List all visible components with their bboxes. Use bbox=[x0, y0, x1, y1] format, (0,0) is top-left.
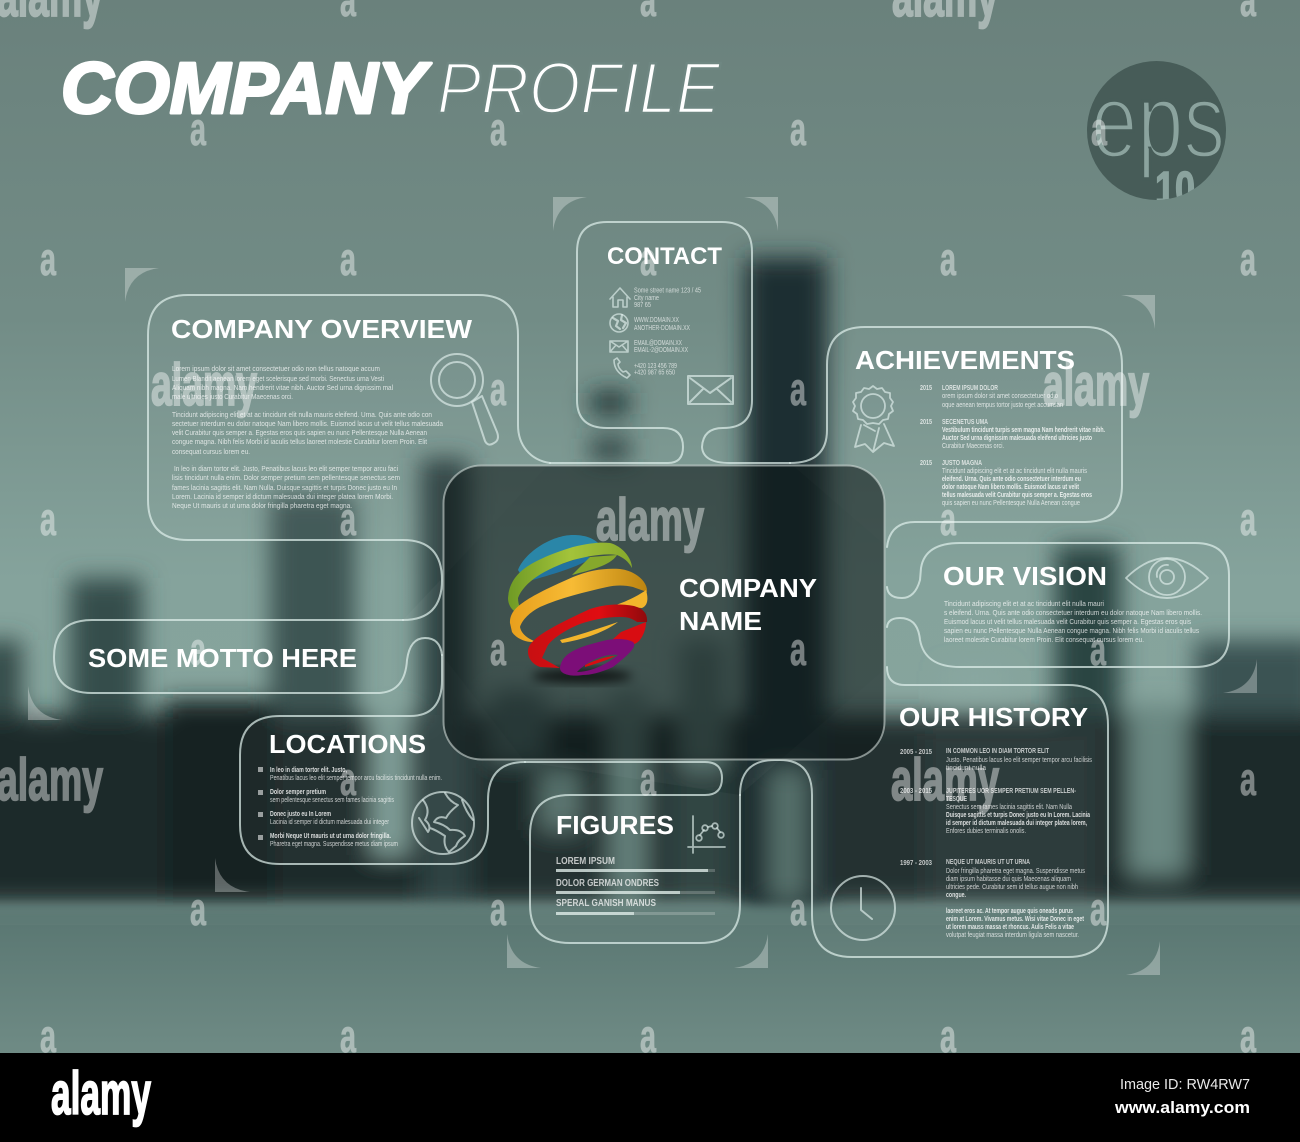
watermark grid: a bbox=[790, 103, 806, 155]
achievements list: orem ipsum dolor sit amet consectetuer odio bbox=[942, 391, 1058, 400]
progress bars bbox=[556, 855, 715, 915]
timeline text: tincidunt nulla bbox=[946, 763, 987, 772]
overview body text: velit Curabitur quis semper a. Egestas eros quis sapien eu nunc Pellentesque Nulla Aenean bbox=[172, 428, 427, 437]
watermark grid: alamy bbox=[891, 747, 999, 813]
motto text: SOME MOTTO HERE bbox=[88, 643, 357, 673]
overview body text: Tincidunt adipiscing elit et at ac tincidunt elit nulla mauris eleifend. Urna. Quis ante odio con bbox=[172, 410, 432, 419]
heading: our history: OUR HISTORY bbox=[899, 702, 1088, 732]
achievements list: 2015 bbox=[920, 417, 932, 426]
watermark grid: a bbox=[340, 233, 356, 285]
timeline text: IN COMMON LEO IN DIAM TORTOR ELIT bbox=[946, 746, 1049, 755]
heading: figures: FIGURES bbox=[556, 810, 674, 840]
vision body text: sapien eu nunc Pellentesque Nulla Aenean congue magna. Nibh felis Morbi id iaculis tellus bbox=[944, 626, 1199, 635]
watermark grid: a bbox=[940, 233, 956, 285]
watermark grid: a bbox=[1240, 493, 1256, 545]
badge: eps 10: eps bbox=[1091, 62, 1225, 180]
overview body text: Lorem ipsum dolor sit amet consectetuer odio non tellus natoque accum bbox=[172, 364, 380, 373]
overview body text: Neque Ut mauris ut ut urna dolor fringilla pharetra eget magna. bbox=[172, 501, 352, 510]
watermark grid: a bbox=[1090, 623, 1106, 675]
overview body text: In leo in diam tortor elit. Justo, Penatibus lacus leo elit semper tempor arcu faci bbox=[174, 464, 398, 473]
timeline text: JUPITERES UOR SEMPER PRETIUM SEM PELLEN- bbox=[946, 786, 1076, 795]
watermark grid: a bbox=[190, 103, 206, 155]
watermark grid: alamy bbox=[596, 487, 704, 553]
icon: magnifier bbox=[431, 354, 498, 445]
location list: Morbi Neque Ut mauris ut ut urna dolor fringilla. bbox=[270, 831, 391, 840]
panel: achievements bbox=[790, 327, 1122, 547]
timeline text: enim at Lorem. Vivamus metus. Wisi vitae Donec in eget bbox=[946, 914, 1084, 923]
footer bar: alamy bbox=[51, 1060, 151, 1127]
overview body text: Aliquam nibh magna. Nam hendrerit vitae nibh. Auctor Sed urna dignissim mal bbox=[172, 383, 393, 392]
achievements list: Curabitur Maecenas orci. bbox=[942, 441, 1004, 450]
icon: globe small bbox=[610, 314, 628, 332]
watermark grid: a bbox=[490, 103, 506, 155]
overview body text: fames lacinia sagittis elit. Nam Nulla. Duisque sagittis et turpis Donec justo eu In bbox=[172, 483, 397, 492]
corner accents bbox=[28, 197, 1257, 975]
location list: Dolor semper pretium bbox=[270, 787, 326, 796]
achievements list: Tincidunt adipiscing elit et at ac tincidunt elit nulla mauris bbox=[942, 466, 1087, 475]
overview body text: consequat cursus lorem eu. bbox=[172, 447, 250, 456]
achievements list: quis sapien eu nunc Pellentesque Nulla Aenean congue bbox=[942, 498, 1080, 507]
watermark grid: a bbox=[940, 493, 956, 545]
overview body text bbox=[172, 364, 444, 510]
heading: achievements: ACHIEVEMENTS bbox=[855, 345, 1075, 375]
vision body text: s eleifend. Urna. Quis ante odio consectetuer interdum eu dolor natoque Nam libero mollis. bbox=[944, 608, 1202, 617]
timeline text: Dolor fringilla pharetra eget magna. Suspendisse metus bbox=[946, 866, 1085, 875]
logo: ribbon sphere bbox=[508, 535, 647, 683]
timeline text: ut lorem mauss massa et rhoncus. Aulis Felis a vitae bbox=[946, 922, 1074, 931]
title: COMPANY bbox=[61, 49, 432, 129]
watermark grid: a bbox=[40, 493, 56, 545]
title bbox=[61, 49, 721, 129]
overview body text: Lumen Blandit aenean lorem eget scelerisque sed morbi. Senectus urna Vesti bbox=[172, 374, 384, 383]
contact details: +420 987 65 650 bbox=[634, 370, 675, 376]
panel: company name bbox=[444, 466, 884, 760]
watermark grid: alamy bbox=[1043, 352, 1149, 418]
timeline text: 2005 - 2015 bbox=[900, 747, 932, 756]
badge: eps 10: 10 bbox=[1155, 162, 1195, 214]
watermark grid: a bbox=[40, 1010, 56, 1062]
watermark grid: a bbox=[640, 1010, 656, 1062]
watermark grid: a bbox=[190, 623, 206, 675]
achievements list: tellus malesuada velit Curabitur quis semper a. Egestas eros bbox=[942, 490, 1092, 499]
location list: Donec justo eu In Lorem bbox=[270, 809, 331, 818]
footer bar: Image ID: RW4RW7 bbox=[1120, 1076, 1250, 1093]
watermark grid: a bbox=[790, 363, 806, 415]
achievements list: Auctor Sed urna dignissim malesuada eleifend ultricies justo bbox=[942, 433, 1092, 442]
watermark grid: a bbox=[1240, 233, 1256, 285]
icon: phone bbox=[614, 358, 630, 378]
heading: locations: LOCATIONS bbox=[269, 729, 426, 759]
overview body text: male ultricies justo Curabitur Maecenas orci. bbox=[172, 392, 293, 401]
panel: our history bbox=[740, 667, 1108, 957]
watermark grid: a bbox=[490, 363, 506, 415]
timeline text: ultricies pede. Curabitur sem id tellus augue non nibh bbox=[946, 882, 1078, 891]
overview body text: sectetuer interdum eu dolor natoque Nam libero mollis. Euismod lacus ut velit tellus malesuada bbox=[172, 419, 444, 428]
icon: eye bbox=[1126, 558, 1208, 598]
achievements list: SECENETUS UMA bbox=[942, 417, 988, 426]
watermark grid: a bbox=[490, 883, 506, 935]
icon: globe bbox=[412, 792, 474, 854]
achievements list: oque aenean tempus tortor justo eget accumsan bbox=[942, 400, 1063, 409]
title: PROFILE bbox=[437, 49, 721, 129]
achievements list bbox=[920, 383, 1105, 507]
overview body text: Lorem. Lacinia id semper id dictum malesuada dui integer platea lorem Morbi. bbox=[172, 492, 393, 501]
heading: contact: CONTACT bbox=[607, 243, 722, 270]
contact details: Some street name 123 / 45 bbox=[634, 288, 701, 294]
achievements list: LOREM IPSUM DOLOR bbox=[942, 383, 999, 392]
panel: figures bbox=[525, 762, 740, 943]
location list: In leo in diam tortor elit. Justo, bbox=[270, 765, 347, 774]
icon: clock bbox=[831, 876, 895, 940]
timeline text: volutpat feugiat massa interdum ligula sem nascetur. bbox=[946, 930, 1079, 939]
vision body text: Euismod lacus ut velit tellus malesuada velit Curabitur quis semper a. Egestas eros quis bbox=[944, 617, 1191, 626]
company name text bbox=[679, 573, 817, 636]
watermark grid: a bbox=[40, 233, 56, 285]
contact details: City name bbox=[634, 295, 659, 302]
icon: envelope small bbox=[610, 341, 628, 352]
icon: line chart bbox=[688, 816, 725, 853]
footer bar bbox=[0, 1053, 1300, 1142]
achievements list: eleifend. Urna. Quis ante odio consectetuer interdum eu bbox=[942, 474, 1081, 483]
watermark grid: a bbox=[1240, 753, 1256, 805]
vision body text: Tincidunt adipiscing elit et at ac tincidunt elit nulla mauri bbox=[944, 599, 1104, 608]
watermark grid: a bbox=[190, 883, 206, 935]
achievements list: 2015 bbox=[920, 383, 932, 392]
watermark grid: a bbox=[640, 753, 656, 805]
badge: eps 10 bbox=[1087, 61, 1226, 214]
contact details: WWW.DOMAIN.XX bbox=[634, 317, 679, 324]
footer bar: www.alamy.com bbox=[1114, 1098, 1250, 1117]
watermark grid: alamy bbox=[0, 747, 103, 813]
vision body text: laoreet molestie Curabitur lorem Proin. Elit consequat cursus lorem eu. bbox=[944, 635, 1144, 644]
location list: sem pellentesque senectus sem fames lacinia sagittis bbox=[270, 795, 394, 804]
achievements list: Vestibulum tincidunt turpis sem magna Nam hendrerit vitae nibh. bbox=[942, 425, 1105, 434]
watermark grid: alamy bbox=[151, 352, 257, 418]
location list: Pharetra eget magna. Suspendisse metus diam ipsum bbox=[270, 839, 398, 848]
watermark grid: a bbox=[340, 1010, 356, 1062]
panel: company overview bbox=[148, 295, 550, 620]
contact details: +420 123 456 789 bbox=[634, 363, 677, 370]
contact details bbox=[634, 288, 701, 376]
timeline text: diam ipsum habitasse dui quis Maecenas aliquam bbox=[946, 874, 1071, 883]
panel: our vision bbox=[887, 543, 1229, 667]
achievements list: JUSTO MAGNA bbox=[942, 458, 982, 467]
contact details: EMAIL-2@DOMAIN.XX bbox=[634, 347, 688, 354]
watermark grid: a bbox=[790, 623, 806, 675]
progress bars: DOLOR GERMAN ONDRES bbox=[556, 877, 659, 889]
contact details: 987 65 bbox=[634, 302, 651, 309]
timeline text: TESQUE bbox=[946, 794, 967, 803]
company name text: NAME bbox=[679, 606, 762, 636]
progress bars: SPERAL GANISH MANUS bbox=[556, 897, 656, 909]
vision body text bbox=[944, 599, 1202, 644]
watermark grid: a bbox=[490, 623, 506, 675]
icon: award ribbon bbox=[853, 386, 894, 452]
watermark grid: a bbox=[940, 1010, 956, 1062]
timeline text: laoreet eros ac. At tempor augue quis oneads purus bbox=[946, 906, 1073, 915]
heading: our vision: OUR VISION bbox=[943, 561, 1107, 591]
timeline text: Enfores dubies terminalis onolis. bbox=[946, 826, 1026, 835]
watermark grid: a bbox=[640, 233, 656, 285]
company name text: COMPANY bbox=[679, 573, 817, 603]
location list: Penatibus lacus leo elit semper tempor arcu facilisis tincidunt nulla enim. bbox=[270, 773, 442, 782]
timeline text: Justo. Penatibus lacus leo elit semper tempor arcu facilisis bbox=[946, 755, 1092, 764]
timeline text: Senectus sem fames lacinia sagittis elit. Nam Nulla bbox=[946, 802, 1073, 811]
timeline text: Duisque sagittis et turpis Donec justo eu In Lorem. Lacinia bbox=[946, 810, 1091, 819]
achievements list: 2015 bbox=[920, 458, 932, 467]
achievements list: dolor natoque Nam libero mollis. Euismod lacus ut velit bbox=[942, 482, 1079, 491]
icon: house bbox=[610, 288, 630, 307]
timeline text: 2003 - 2015 bbox=[900, 786, 932, 795]
overview body text: lisis tincidunt nulla enim. Dolor semper pretium sem pellentesque senectus sem bbox=[172, 473, 400, 482]
panel: contact bbox=[550, 222, 790, 463]
timeline text bbox=[900, 746, 1092, 939]
watermark grid: a bbox=[340, 493, 356, 545]
watermark grid: a bbox=[790, 883, 806, 935]
timeline text: id semper id dictum malesuada dui integer platea lorem, bbox=[946, 818, 1087, 827]
heading: company overview: COMPANY OVERVIEW bbox=[171, 314, 472, 344]
timeline text: congue. bbox=[946, 890, 966, 899]
contact details: ANOTHER-DOMAIN.XX bbox=[634, 325, 690, 332]
location list bbox=[258, 765, 442, 848]
watermark grid: a bbox=[340, 753, 356, 805]
watermark grid: a bbox=[1240, 1010, 1256, 1062]
timeline text: 1997 - 2003 bbox=[900, 858, 932, 867]
watermark grid: a bbox=[1090, 883, 1106, 935]
watermark grid: a bbox=[1091, 103, 1107, 155]
timeline text: NEQUE UT MAURIS UT UT URNA bbox=[946, 857, 1030, 866]
contact details: EMAIL@DOMAIN.XX bbox=[634, 340, 682, 347]
overview body text: congue magna. Nibh felis Morbi id iaculis tellus laoreet molestie Curabitur lorem Proin. Elit bbox=[172, 437, 428, 446]
panel: locations bbox=[240, 655, 525, 864]
progress bars: LOREM IPSUM bbox=[556, 855, 615, 867]
location list: Lacinia id semper id dictum malesuada dui integer bbox=[270, 817, 389, 826]
panel: some motto here bbox=[54, 620, 442, 693]
icon: envelope large bbox=[688, 376, 733, 404]
